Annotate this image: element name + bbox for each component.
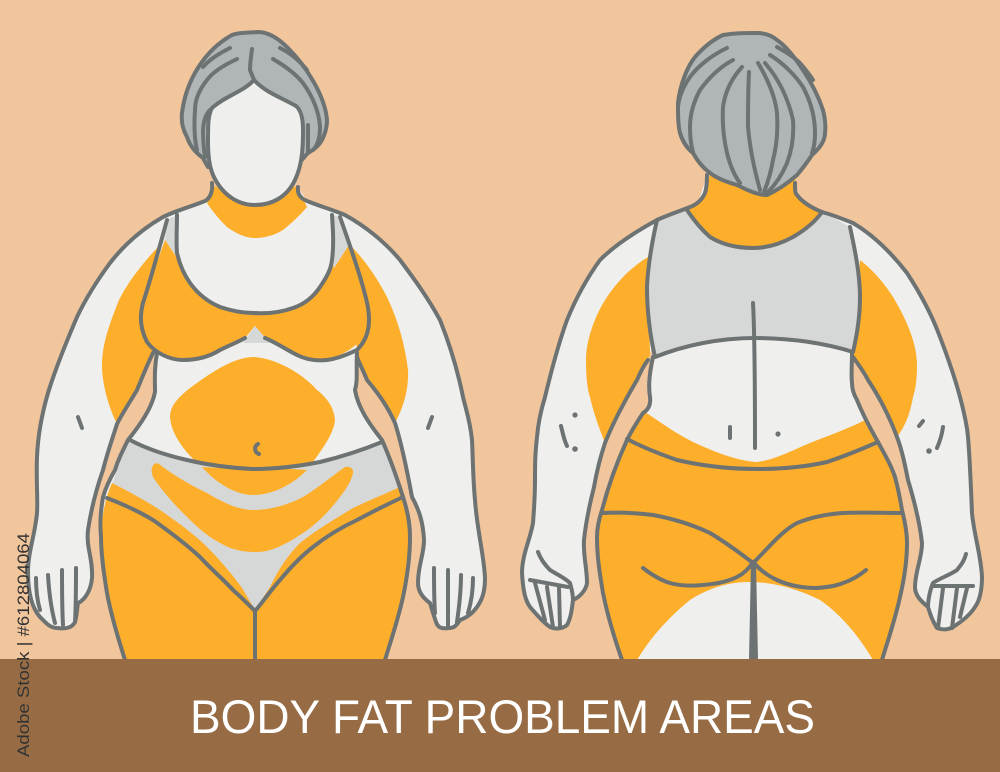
left arm, back view bbox=[522, 175, 707, 628]
left hand details bbox=[530, 552, 573, 627]
body outlines, back view bbox=[522, 175, 982, 660]
leg openings bbox=[107, 497, 403, 611]
left fingers bbox=[36, 568, 76, 625]
fat area: upper arm right bbox=[352, 247, 408, 423]
bra neckline bbox=[177, 215, 333, 313]
face bbox=[208, 80, 303, 205]
fat area: right thigh bbox=[255, 487, 409, 660]
torso sides bbox=[100, 353, 157, 660]
briefs bbox=[107, 440, 403, 610]
spine line bbox=[753, 303, 755, 448]
body outlines, front view bbox=[28, 183, 485, 660]
fat area: upper arm left bbox=[102, 247, 158, 424]
title: BODY FAT PROBLEM AREAS bbox=[190, 690, 815, 743]
navel bbox=[255, 444, 259, 454]
right arm, front view bbox=[298, 187, 485, 628]
image id note: Adobe Stock | #612804064 bbox=[14, 533, 33, 757]
right fingers bbox=[434, 568, 473, 627]
fat area: back of neck bbox=[687, 172, 822, 248]
hair, front view bbox=[182, 32, 327, 167]
torso sides bbox=[597, 357, 653, 660]
fat area: belly overlap below waistband bbox=[202, 467, 307, 495]
skin marks bbox=[561, 421, 943, 448]
hair, back view bbox=[678, 33, 825, 195]
fat area: left thigh bbox=[101, 483, 255, 660]
fat area: neck and chin bbox=[207, 187, 307, 238]
torso, back view bbox=[597, 175, 907, 660]
bra outer bbox=[141, 220, 245, 360]
bra straps bbox=[165, 215, 349, 268]
figure: front view bbox=[28, 32, 485, 660]
tank top bbox=[647, 210, 860, 357]
skin dots bbox=[572, 412, 932, 454]
buttock lines bbox=[602, 513, 902, 563]
torso bbox=[101, 187, 410, 660]
title band bbox=[0, 659, 1000, 772]
fat area: upper back right bbox=[853, 260, 917, 437]
right arm, back view bbox=[795, 183, 982, 629]
centre leg line bbox=[749, 562, 758, 660]
fat area: bust bbox=[141, 240, 368, 360]
tank top outline bbox=[647, 220, 860, 357]
sternum triangle bbox=[243, 326, 270, 343]
fat area: upper back left bbox=[586, 257, 650, 443]
figure: back view bbox=[522, 33, 982, 660]
fat area: lower abdomen crescent bbox=[152, 463, 353, 552]
left arm, front view bbox=[28, 187, 212, 628]
elbow marks bbox=[78, 417, 432, 428]
fat area: belly bbox=[170, 357, 335, 495]
right hand details bbox=[928, 554, 973, 628]
waistband bbox=[130, 440, 382, 469]
inner thighs bbox=[637, 582, 873, 660]
fat area: hips and buttocks bbox=[597, 412, 907, 660]
waistband bbox=[627, 439, 878, 469]
